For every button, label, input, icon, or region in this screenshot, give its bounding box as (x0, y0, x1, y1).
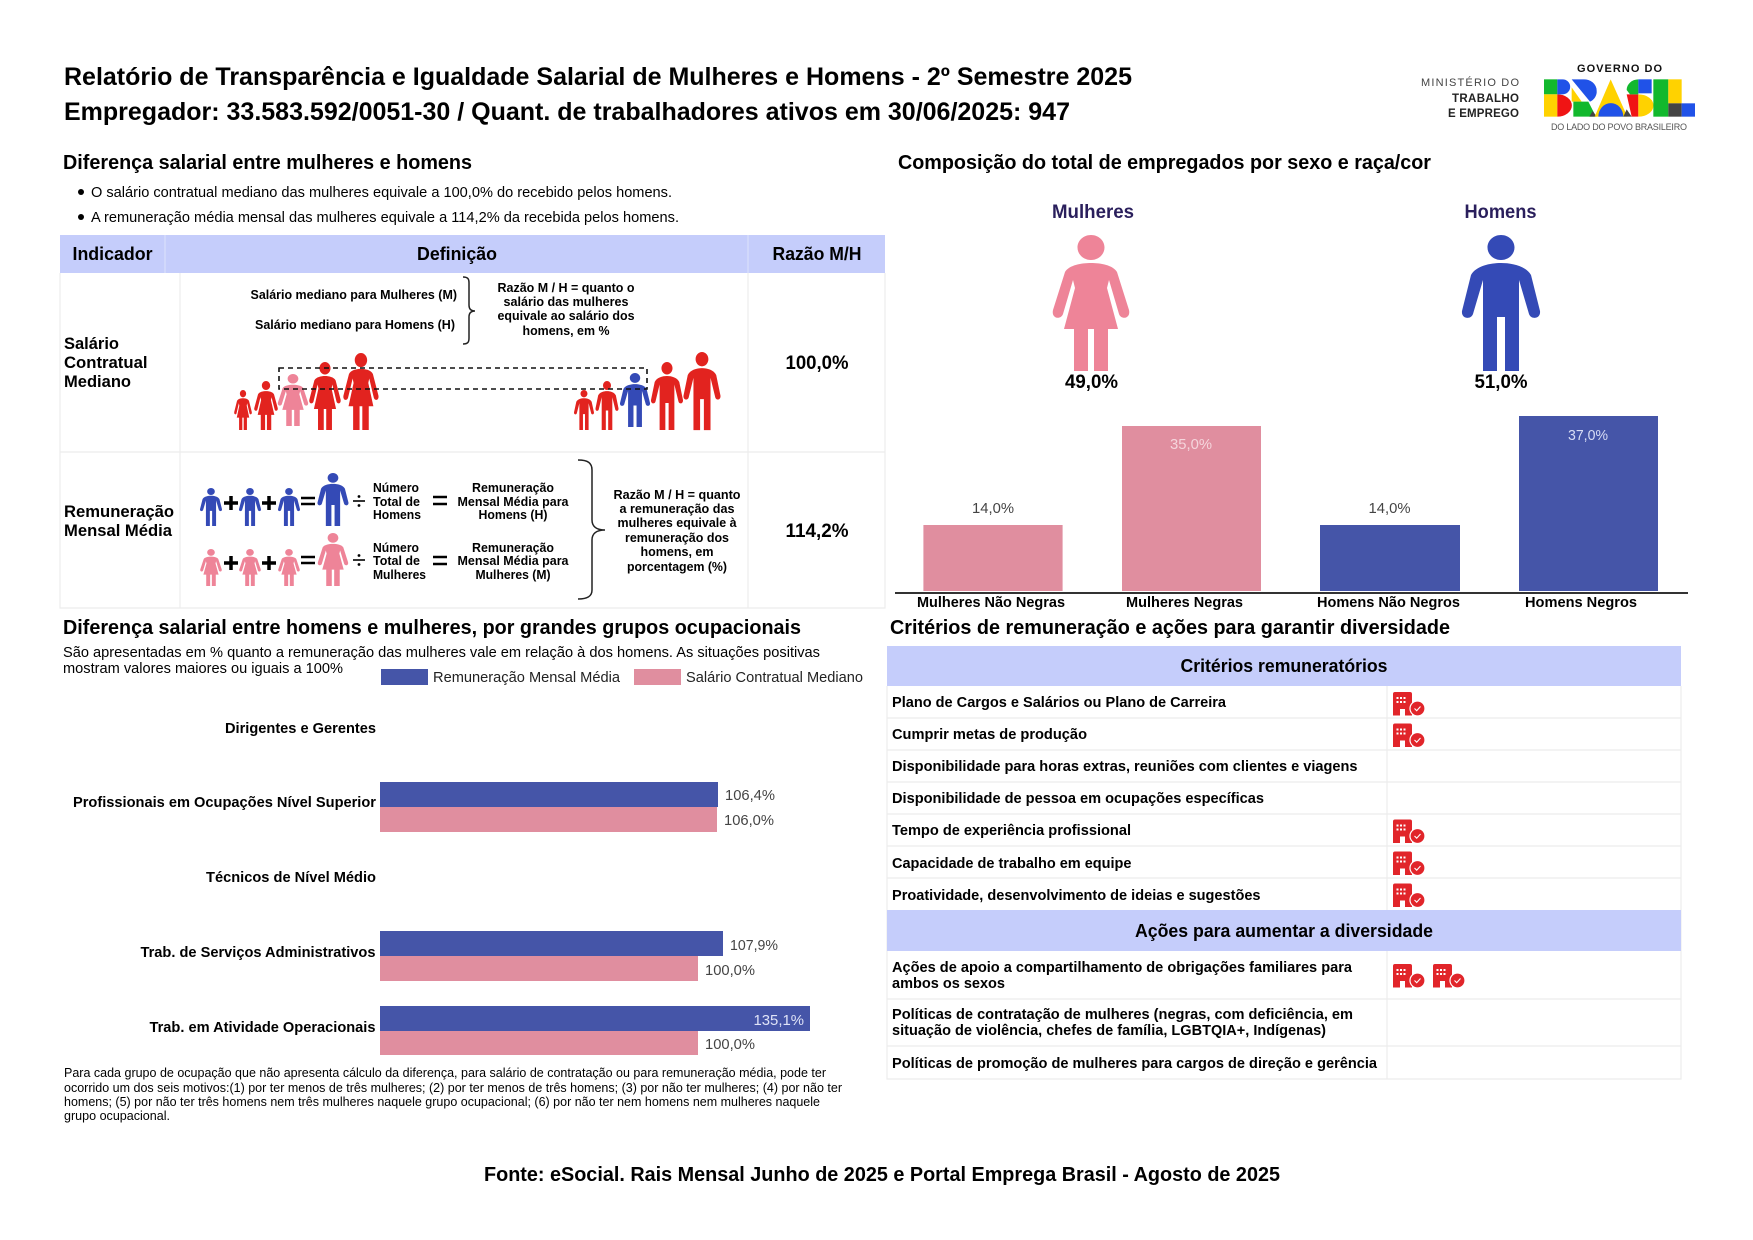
panel: diferença por grupos ocupacionais (63, 617, 863, 1123)
formula: homens: Total de (373, 494, 420, 509)
list: critérios: Plano de Cargos e Salários ou Plano de Carreira (892, 695, 1227, 711)
logo: Ministério do Trabalho e Emprego / Governo do Brasil: E EMPREGO (1448, 108, 1519, 120)
formula: homens: Número (373, 480, 419, 495)
title (64, 63, 1132, 126)
list: ações: situação de violência, chefes de família, LGBTQIA+, Indígenas) (892, 1023, 1326, 1039)
bullet list: O salário contratual mediano das mulheres equivale a 100,0% do recebido pelos homens. (91, 185, 672, 201)
table header: Definição (417, 244, 497, 264)
definition labels (250, 287, 457, 332)
table header (60, 235, 885, 273)
definition: razão M/H: Razão M / H = quanto (614, 487, 741, 502)
bar chart: sexo e raça: Mulheres Não Negras (917, 594, 1065, 611)
list: critérios: Disponibilidade de pessoa em ocupações específicas (892, 791, 1264, 807)
formula: mulheres: Mulheres (M) (476, 567, 550, 582)
table header: Razão M/H (772, 244, 862, 264)
heading: critérios: Critérios de remuneração e ações para garantir diversidade (890, 617, 1450, 639)
formula: homens (200, 473, 569, 526)
definition: razão M/H: remuneração dos (625, 530, 729, 545)
women figure (1052, 202, 1134, 393)
formula: homens: Mensal Média para (458, 494, 569, 509)
formula: homens: Homens (H) (478, 507, 548, 522)
row: remuneração mensal média (64, 460, 849, 599)
legend: Remuneração Mensal Média (433, 669, 621, 686)
footnote: grupo ocupacional. (64, 1108, 170, 1123)
table header: Indicador (72, 244, 152, 264)
definition: razão M/H: homens, em % (522, 323, 610, 338)
list: critérios (892, 695, 1358, 904)
bar chart: sexo e raça: Mulheres Negras (1126, 594, 1243, 611)
bar chart: sexo e raça: Homens Não Negros (1317, 594, 1460, 611)
bar chart: grupos ocupacionais: Dirigentes e Gerentes (225, 720, 376, 737)
icons: empresa com critério (1393, 692, 1425, 908)
definition: razão M/H: porcentagem (%) (627, 559, 727, 574)
list: ações: Políticas de promoção de mulheres para cargos de direção e gerência (892, 1056, 1378, 1072)
bar chart: grupos ocupacionais: 100,0% (705, 963, 755, 979)
panel: diferença salarial (60, 152, 885, 608)
bar chart: grupos ocupacionais: 100,0% (705, 1037, 755, 1053)
indicator label: Mediano (64, 373, 131, 391)
formula: mulheres: Total de (373, 553, 420, 568)
list: ações: Políticas de contratação de mulheres (negras, com deficiência, em (892, 1007, 1353, 1023)
row: salário contratual mediano (64, 277, 849, 430)
indicator label: Mensal Média (64, 522, 173, 540)
definition: razão M/H (614, 487, 741, 574)
legend (381, 669, 863, 686)
list: critérios: Cumprir metas de produção (892, 727, 1087, 743)
footnote: ocorrido um dos seis motivos:(1) por ter menos de três mulheres; (2) por ter menos de três homens; (3) por não ter mulheres; (4) por não ter (64, 1080, 843, 1095)
definition labels: Salário mediano para Homens (H) (255, 317, 455, 332)
formula: mulheres: Mensal Média para (458, 553, 569, 568)
description: São apresentadas em % quanto a remuneração das mulheres vale em relação à dos homens. As situações positivas (63, 645, 820, 661)
indicator label (64, 503, 174, 540)
logo: Ministério do Trabalho e Emprego / Governo do Brasil (1421, 63, 1695, 132)
bar chart: grupos ocupacionais: Trab. em Atividade Operacionais (150, 1019, 376, 1036)
logo: Ministério do Trabalho e Emprego / Governo do Brasil: DO LADO DO POVO BRASILEIRO (1551, 122, 1687, 132)
icons: empresa com ação (1393, 964, 1465, 988)
brace (463, 277, 475, 344)
footnote: Para cada grupo de ocupação que não apresenta cálculo da diferença, para salário de contratação ou para remuneração média, pode ter (64, 1065, 827, 1080)
logo: Ministério do Trabalho e Emprego / Governo do Brasil: MINISTÉRIO DO (1421, 76, 1519, 89)
women figure: 49,0% (1065, 372, 1118, 393)
bar chart: grupos ocupacionais: 107,9% (730, 938, 778, 954)
bar chart: grupos ocupacionais: 106,4% (725, 788, 775, 804)
footnote (64, 1065, 843, 1123)
bar chart: sexo e raça: 35,0% (1170, 437, 1212, 453)
header: critérios remuneratórios: Critérios remuneratórios (1180, 656, 1388, 676)
indicator label: Contratual (64, 354, 148, 372)
bar chart: sexo e raça: 14,0% (1368, 501, 1411, 517)
bar chart: grupos ocupacionais: Profissionais em Ocupações Nível Superior (73, 794, 376, 811)
bullet list (78, 185, 679, 226)
formula: mulheres: Remuneração (472, 540, 554, 555)
bullet list: A remuneração média mensal das mulheres equivale a 114,2% da recebida pelos homens. (91, 210, 679, 226)
description (63, 645, 820, 677)
bar chart: sexo e raça (895, 416, 1688, 611)
bar chart: grupos ocupacionais: 106,0% (724, 813, 774, 829)
list: critérios: Disponibilidade para horas extras, reuniões com clientes e viagens (892, 759, 1358, 775)
list: critérios: Tempo de experiência profissional (892, 823, 1131, 839)
panel: composição por sexo e raça/cor (895, 152, 1688, 611)
definition: razão M/H: homens, em (640, 544, 714, 559)
heading: grupos ocupacionais: Diferença salarial entre homens e mulheres, por grandes grupos ocupacionais (63, 617, 801, 639)
title: Empregador: 33.583.592/0051-30 / Quant. de trabalhadores ativos em 30/06/2025: 947 (64, 98, 1070, 126)
heading: composição: Composição do total de empregados por sexo e raça/cor (898, 152, 1431, 174)
list: critérios: Capacidade de trabalho em equipe (892, 856, 1132, 872)
definition: razão M/H: salário das mulheres (504, 294, 628, 309)
women figure: Mulheres (1052, 202, 1134, 223)
icons: women line-up (234, 353, 379, 430)
legend: Salário Contratual Mediano (686, 669, 863, 686)
formula: mulheres (200, 533, 569, 586)
description: mostram valores maiores ou iguais a 100% (63, 661, 343, 677)
men figure: 51,0% (1474, 372, 1528, 393)
header: critérios remuneratórios (887, 646, 1681, 686)
heading: diferença salarial: Diferença salarial entre mulheres e homens (63, 152, 472, 174)
logo: Ministério do Trabalho e Emprego / Governo do Brasil: GOVERNO DO (1577, 63, 1662, 75)
formula: mulheres: Mulheres (373, 567, 426, 582)
header: ações: Ações para aumentar a diversidade (1135, 921, 1433, 941)
bar chart: grupos ocupacionais: 135,1% (754, 1013, 804, 1029)
bar chart: grupos ocupacionais: Trab. de Serviços Administrativos (140, 944, 376, 961)
definition: razão M/H: mulheres equivale à (618, 515, 737, 530)
definition: razão M/H (498, 280, 635, 338)
men figure (1462, 202, 1540, 393)
definition: razão M/H: equivale ao salário dos (498, 308, 634, 323)
definition labels: Salário mediano para Mulheres (M) (250, 287, 457, 302)
definition: razão M/H: a remuneração das (620, 501, 734, 516)
list: ações (892, 960, 1378, 1072)
value: salário contratual: 100,0% (786, 353, 849, 374)
formula: homens: Remuneração (472, 480, 554, 495)
bar chart: sexo e raça: Homens Negros (1525, 594, 1637, 611)
bar chart: sexo e raça: 14,0% (972, 501, 1014, 517)
indicator label: Remuneração (64, 503, 174, 521)
logo: Ministério do Trabalho e Emprego / Governo do Brasil: TRABALHO (1452, 93, 1519, 105)
title: Relatório de Transparência e Igualdade Salarial de Mulheres e Homens - 2º Semestre 2025 (64, 63, 1132, 91)
brace (578, 460, 605, 599)
source footer: Fonte: eSocial. Rais Mensal Junho de 2025 e Portal Emprega Brasil - Agosto de 2025 (484, 1164, 1280, 1186)
indicator label (64, 335, 148, 391)
header: ações (887, 910, 1681, 951)
footnote: homens; (5) por não ter três homens nem três mulheres naquele grupo ocupacional; (6) por não ter nem homens nem mulheres naquele (64, 1094, 820, 1109)
list: ações: ambos os sexos (892, 976, 1005, 992)
dashed median box (279, 368, 647, 389)
icons: men line-up (574, 352, 721, 430)
list: critérios: Proatividade, desenvolvimento de ideias e sugestões (892, 888, 1260, 904)
formula: mulheres: Número (373, 540, 419, 555)
list: ações: Ações de apoio a compartilhamento de obrigações familiares para (892, 960, 1353, 976)
value: remuneração média: 114,2% (786, 521, 849, 542)
men figure: Homens (1464, 202, 1536, 223)
definition: razão M/H: Razão M / H = quanto o (498, 280, 635, 295)
indicator label: Salário (64, 335, 119, 353)
formula: homens: Homens (373, 507, 421, 522)
bar chart: grupos ocupacionais: Técnicos de Nível Médio (206, 869, 376, 886)
bar chart: sexo e raça: 37,0% (1568, 428, 1608, 444)
panel: critérios de remuneração e ações (887, 617, 1681, 1079)
bar chart: grupos ocupacionais (73, 720, 810, 1055)
